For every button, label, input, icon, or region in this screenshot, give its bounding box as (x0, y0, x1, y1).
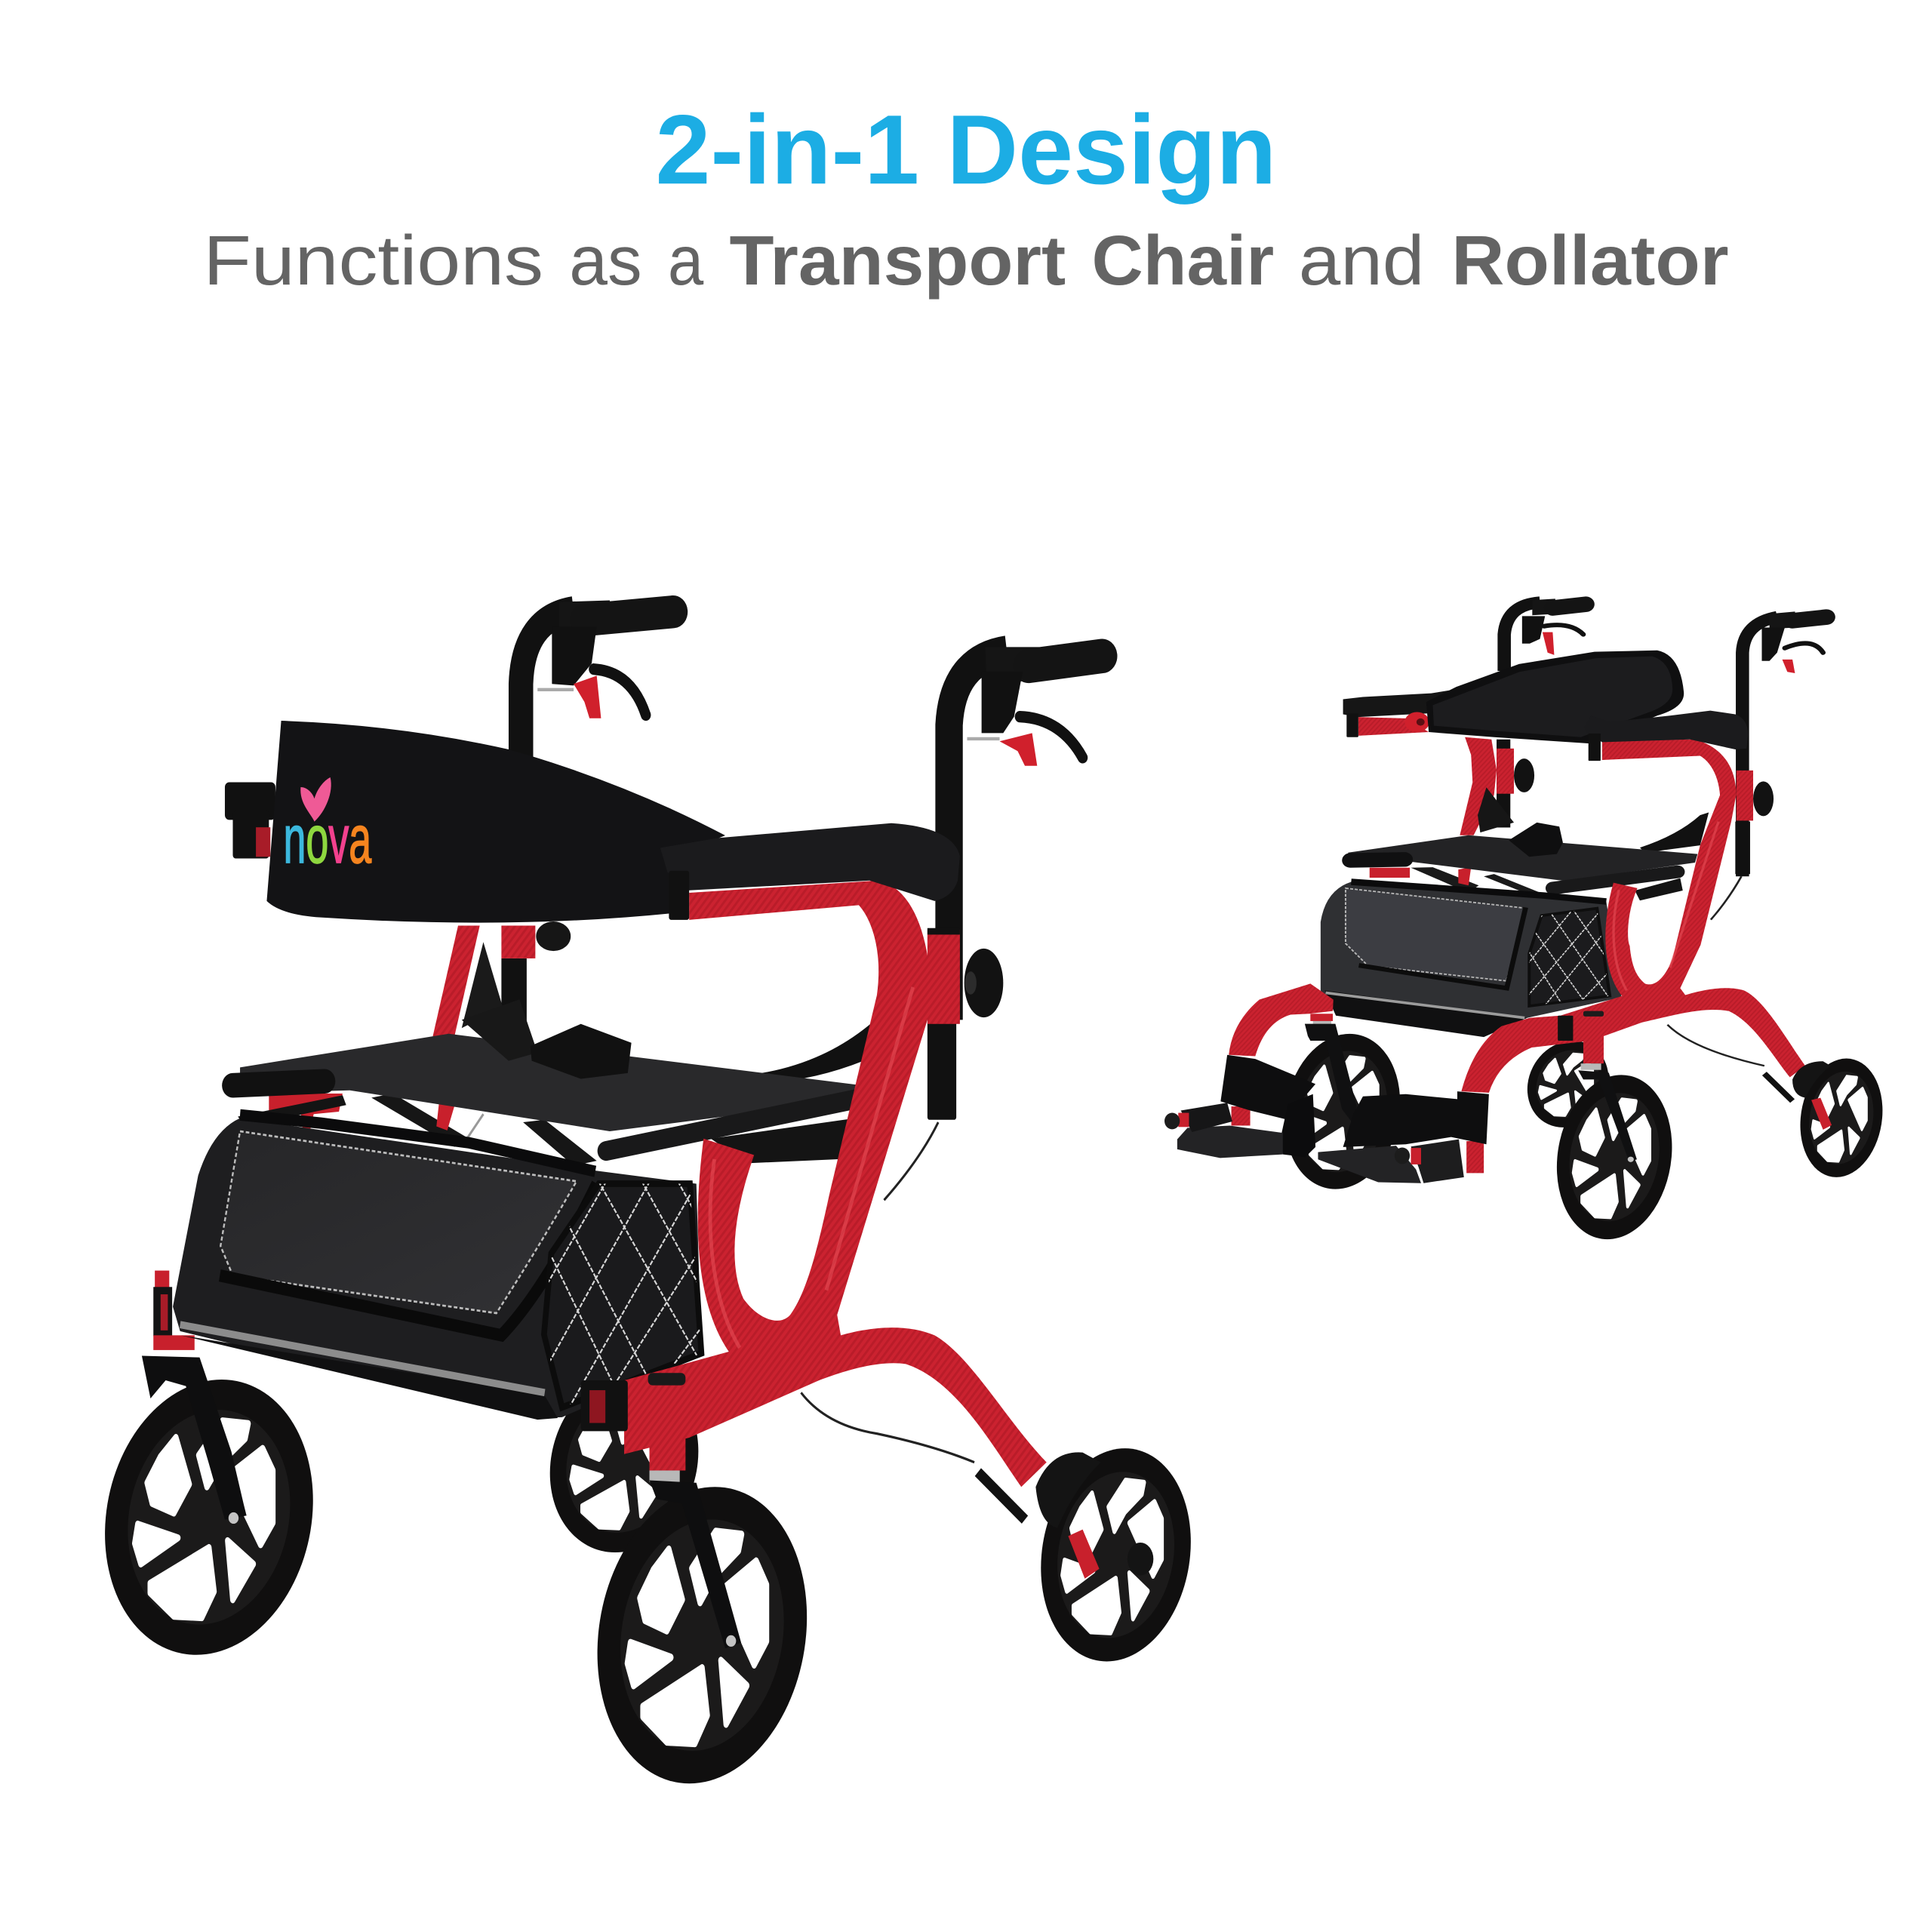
right armrest (1584, 711, 1748, 761)
center arch leg (1461, 1016, 1571, 1093)
subtitle: a (668, 221, 703, 300)
front fork (1578, 1070, 1637, 1161)
rear strut and clamp (433, 921, 571, 1036)
storage bag (173, 1115, 711, 1438)
rear tube (1811, 1098, 1832, 1130)
under seat mechanism (238, 1094, 855, 1166)
back hidden wheel (541, 1372, 707, 1552)
front small wheel (1278, 1034, 1407, 1189)
near handle (1735, 611, 1826, 876)
infographic canvas (105, 112, 1882, 1784)
backrest mesh (1426, 651, 1684, 743)
subtitle: Rollator (1451, 221, 1729, 300)
height clamp and knob (928, 928, 1003, 1024)
subtitle: as (569, 221, 642, 300)
center leg lower (1466, 1141, 1484, 1173)
back hidden wheel (1523, 1041, 1614, 1128)
front wheel (586, 1487, 819, 1783)
left fork (1305, 1014, 1357, 1122)
brake spring (978, 1472, 1025, 1520)
brake spring (1764, 1074, 1792, 1101)
rollator: large product photo in rollator mode (93, 600, 1199, 1783)
rear strut (1460, 737, 1534, 835)
subtitle: and (1299, 221, 1424, 300)
hub bolt front (726, 1635, 736, 1647)
left arch leg (1229, 983, 1334, 1057)
subtitle: Functions (203, 221, 543, 300)
far armrest (225, 782, 275, 858)
back strap (761, 1011, 884, 1083)
far handle with brake (521, 600, 673, 761)
rear axle (1128, 1543, 1153, 1575)
title: 2-in-1 Design (656, 94, 1276, 205)
front fork (650, 1481, 741, 1648)
brake cable (1667, 1025, 1764, 1066)
clamp window (589, 1390, 605, 1423)
right clamp and knob (1737, 771, 1774, 820)
front wheel (1550, 1075, 1678, 1239)
nova logo: nova (283, 801, 372, 877)
seat belt buckle (1509, 823, 1563, 857)
main red frame (1561, 740, 1805, 1077)
far wheel A (93, 1380, 325, 1655)
near handle with brake (928, 647, 1102, 1120)
far post clamp (153, 1271, 195, 1350)
far fork (142, 1355, 247, 1520)
transport chair: small product photo with footrests (1164, 598, 1887, 1239)
subtitle: Chair (1092, 221, 1274, 300)
front clamp (581, 1380, 628, 1431)
red main frame (624, 881, 1047, 1487)
hub bolt (1628, 1157, 1634, 1162)
rear right wheel (1032, 1448, 1199, 1661)
rear right wheel (1795, 1059, 1887, 1177)
right footrest (1318, 1091, 1489, 1183)
front post (1581, 1011, 1604, 1070)
cable upper (1711, 876, 1741, 920)
left armrest and bracket (1343, 689, 1457, 737)
front post (648, 1373, 685, 1482)
seat belt and buckle (462, 999, 632, 1079)
far handle (1504, 598, 1586, 671)
storage bag (1321, 881, 1622, 1037)
backrest (266, 721, 725, 923)
near armrest (660, 823, 960, 920)
left footrest (1164, 1055, 1315, 1158)
small rear tube (1068, 1530, 1100, 1579)
under seat mechanism (1370, 867, 1683, 900)
hub bolt far (229, 1512, 238, 1524)
seat (232, 1034, 863, 1151)
rear right wheel housing (1035, 1452, 1100, 1527)
subtitle: Transport (730, 221, 1066, 300)
wheel housing (1792, 1061, 1831, 1098)
front clamp (1558, 1016, 1573, 1041)
back strap (1640, 813, 1709, 853)
brake cables (801, 1122, 974, 1463)
seat (1348, 835, 1697, 888)
